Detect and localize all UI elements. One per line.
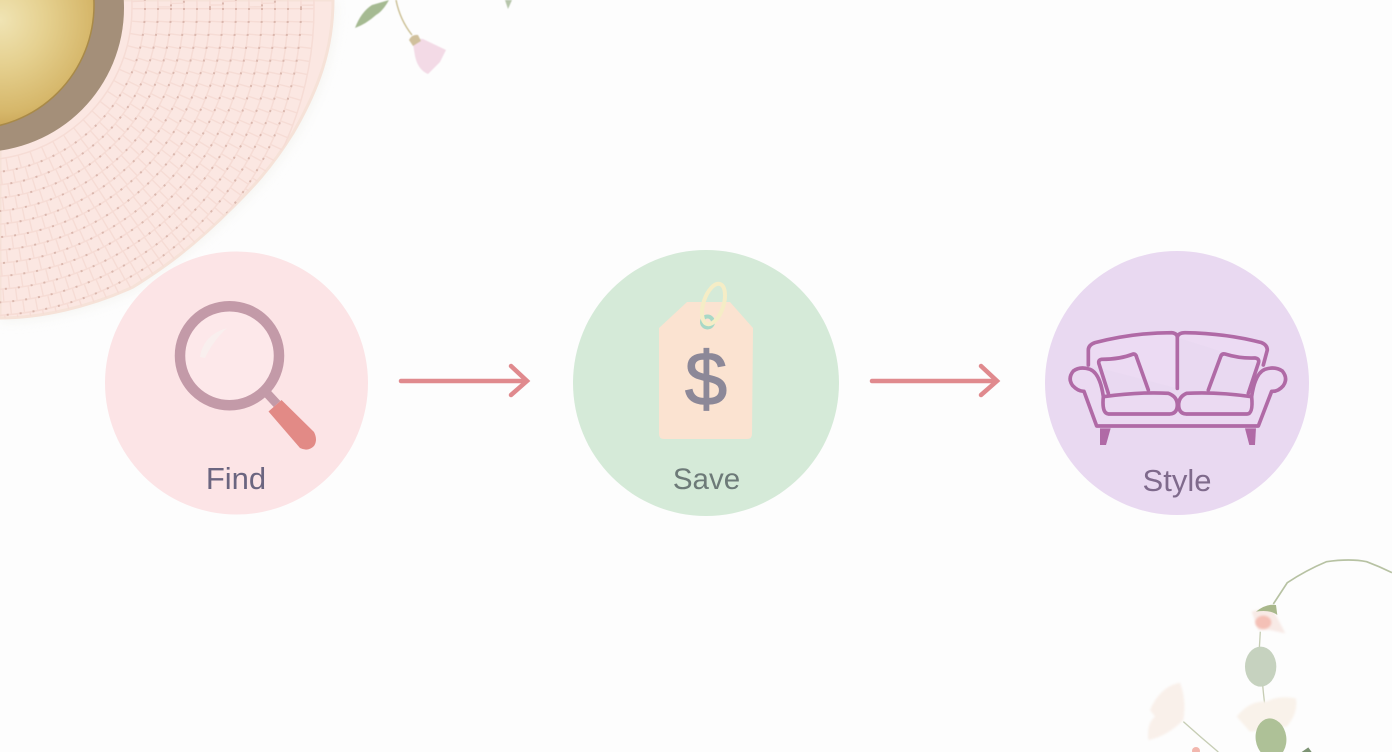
brim weave texture — [0, 0, 314, 342]
gold crown — [0, 0, 94, 129]
pink bud — [1252, 605, 1285, 633]
hat brim — [0, 0, 333, 318]
icon: price tag — [659, 281, 753, 439]
lower leaf — [1253, 716, 1289, 752]
blossom — [412, 38, 446, 74]
circle: find — [105, 252, 368, 514]
curved stem — [1273, 560, 1392, 604]
blossom base — [409, 35, 421, 46]
icon: price tag: $ — [685, 337, 727, 422]
label: save: Save — [673, 463, 740, 496]
label: find: Find — [206, 461, 266, 496]
arrow: save to style — [872, 366, 997, 395]
photo: top flower sprig — [355, 0, 512, 74]
stem — [396, 0, 412, 35]
pale blossom — [1148, 683, 1184, 740]
round leaf — [1245, 647, 1276, 687]
icon: sofa — [1070, 333, 1286, 445]
leaf fragment — [505, 0, 512, 9]
photo: woven hat — [0, 0, 336, 342]
arrow: find to save — [401, 366, 527, 395]
hat crown band — [0, 0, 124, 152]
step 3: style — [1045, 251, 1309, 515]
circle: save — [573, 250, 839, 516]
step 2: save — [573, 250, 839, 516]
photo: bottom right flower sprig — [1148, 560, 1392, 752]
leaf — [355, 0, 389, 28]
step 1: find — [105, 252, 368, 514]
leaf tip — [1302, 747, 1312, 752]
pale blossom cluster — [1237, 697, 1296, 732]
icon: magnifying glass — [180, 306, 316, 450]
circle: style — [1045, 251, 1309, 515]
bud tip — [1192, 747, 1200, 752]
label: style: Style — [1143, 463, 1211, 498]
thin stems — [1183, 632, 1267, 752]
